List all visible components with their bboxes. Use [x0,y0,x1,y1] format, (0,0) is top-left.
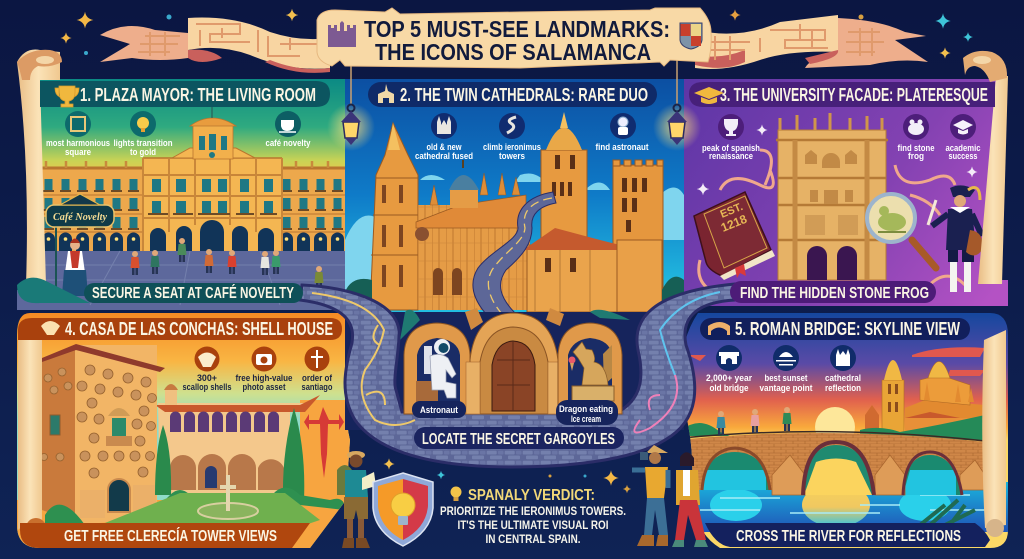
icon: trophy [55,86,79,107]
santiago cross [304,407,344,478]
backpacker traveller [337,451,376,548]
icon: arch bridge [716,345,742,371]
panel 4 scroll [18,338,42,530]
winding road [473,192,556,314]
feature labels: scallop shells [182,382,232,393]
icon: cap [950,114,976,140]
woman in red dress [62,238,88,296]
panel 2 header [368,82,657,107]
icon: cathedral [431,113,457,139]
feature labels [702,143,980,162]
icon: scallop [194,346,220,372]
lantern left [327,65,375,151]
title text: TOP 5 MUST-SEE LANDMARKS: [364,16,670,42]
icon: cathedral reflection [830,345,856,371]
tree clumps [346,276,684,300]
astronaut label: Astronaut [420,405,459,416]
scholar [928,185,982,292]
verdict text: PRIORITIZE THE IERONIMUS TOWERS. [440,504,626,518]
old cathedral [370,123,530,310]
icon: tower climb [499,113,525,139]
panel 1: Plaza Mayor [17,79,347,311]
feature labels: square [65,147,91,158]
feature labels: santiago [302,382,333,393]
feature labels: cathedral [825,373,861,384]
feature labels: peak of spanish [702,143,760,154]
panel 1 header: 1. PLAZA MAYOR: THE LIVING ROOM [80,85,316,105]
title banner [317,8,711,68]
panel 4: Casa de las Conchas [17,313,370,550]
clouds [345,174,684,300]
panel 4 callout [20,523,310,548]
skyline [865,360,985,435]
panel 2 header: 2. THE TWIN CATHEDRALS: RARE DUO [400,85,648,105]
feature labels [182,373,333,393]
feature labels: frog [908,151,924,162]
feature labels: towers [499,151,525,162]
panel 2 icons and labels [415,113,649,162]
feature labels: 2,000+ year [706,373,752,384]
icon: graduation cap [694,87,724,104]
photographer couple [632,445,708,547]
panel 5 callout [705,523,990,547]
courtyard [100,493,320,525]
feature labels: cathedral fused [415,151,473,162]
feature labels [706,373,861,394]
panel 5 icons and labels [706,345,861,394]
cypress trees and bushes [155,408,304,500]
book EST. 1218: EST. [719,201,745,221]
plaza people [130,238,324,290]
locate gargoyles callout [414,427,624,449]
dragon label [556,400,618,425]
panel 5 scroll [982,330,1006,528]
feature labels: find stone [898,143,934,154]
panel 1 callout: SECURE A SEAT AT CAFÉ NOVELTY [92,285,294,302]
locate gargoyles callout: LOCATE THE SECRET GARGOYLES [422,431,615,448]
right ribbon [695,15,928,69]
icon: cup [718,114,744,140]
icon: camera [252,346,276,372]
cafe novelty sign: Café Novelty [53,211,107,223]
cafe novelty sign [46,194,114,300]
plaza building [40,107,345,252]
feature labels: café novelty [266,138,311,149]
panel 4 icons and labels [182,346,333,393]
decorative stars [60,9,973,59]
right scroll [963,51,1008,284]
feature labels: old & new [426,142,462,153]
panel 3: University Facade [684,79,1014,307]
icon: santiago cross [304,346,330,372]
icon: bulb [450,486,462,501]
panel 1 header [40,81,330,107]
feature labels: old bridge [710,383,748,394]
title text [364,16,670,65]
feature labels: find astronaut [596,142,649,153]
panel 2: Twin Cathedrals [345,79,684,314]
panel 5: Roman Bridge [675,313,1010,549]
verdict shield [373,473,433,546]
central door arch [465,308,564,414]
golden swirl on path [312,293,415,425]
panel 3 callout: FIND THE HIDDEN STONE FROG [740,285,929,302]
new cathedral and towers [523,112,663,312]
feature labels: renaissance [709,151,753,162]
feature labels: 300+ [197,373,217,384]
astronaut label [412,401,466,418]
icon: bridge [708,322,730,335]
bridge [678,432,985,495]
feature labels: climb ieronimus [483,142,541,153]
river [675,482,1010,532]
title text: THE ICONS OF SALAMANCA [375,39,651,65]
icon: square plaza [65,111,91,137]
feature labels: to gold [130,147,156,158]
panel 1 bottom tail [17,278,90,303]
book EST. 1218: 1218 [719,212,749,235]
icon: coat of arms [680,23,702,49]
distant trees [682,415,985,440]
shell house tower [40,344,165,525]
facade [776,113,888,280]
feature labels [415,142,649,162]
verdict text [440,486,626,546]
panel 5 callout: CROSS THE RIVER FOR REFLECTIONS [736,528,961,545]
panel 4 header: 4. CASA DE LAS CONCHAS: SHELL HOUSE [65,319,333,339]
feature labels: lights transition [114,138,173,149]
icon: coffee cup [275,111,301,137]
icon: sunset [773,345,799,371]
feature labels: success [948,151,978,162]
panel 5 header [700,318,970,340]
feature labels: order of [302,373,333,384]
icon: astronaut [610,113,636,139]
central path area [300,284,735,467]
blue and pink swirl on path [660,292,720,375]
verdict text: IT'S THE ULTIMATE VISUAL ROI [458,518,608,532]
feature labels: most harmonious [46,138,110,149]
panel 1 icons and labels [46,111,311,158]
left scroll [17,50,62,285]
feature labels: best sunset [764,373,808,384]
verdict stars [383,458,631,493]
icon: light bulb [130,111,156,137]
sun [815,407,855,434]
cloister [155,384,320,495]
tourists on bridge [716,407,792,435]
panel 3 icons and labels [702,114,980,162]
icon: church [378,84,394,103]
panel 4 header [18,318,342,340]
feature labels [46,138,311,158]
panel 4 callout: GET FREE CLERECÍA TOWER VIEWS [64,528,277,545]
verdict text: SPANALY VERDICT: [468,487,595,504]
feature labels: free high-value [236,373,292,384]
icon: frog [903,114,929,140]
astronaut arch [404,323,470,414]
verdict text: IN CENTRAL SPAIN. [486,532,580,546]
book EST. 1218 [694,192,775,280]
palm leaves [920,500,975,525]
lantern right [653,58,701,151]
feature labels: vantage point [760,383,813,394]
feature labels: reflection [825,383,861,394]
icon: castle [328,21,356,47]
icon: shell [41,321,60,335]
feature labels: photo asset [242,382,286,393]
panel 1 callout [84,283,303,303]
left ribbon [100,18,330,73]
dragon label: Dragon eating [559,404,613,415]
panel 3 header [689,82,995,107]
dragon label: Ice cream [571,414,601,425]
plaza floor [17,251,347,311]
feature labels: academic [946,143,980,154]
dragon arch [558,323,622,414]
secret gargoyle arches [404,308,622,414]
magnifier with frog [867,194,936,268]
panel 3 callout [730,281,936,303]
decorative swirls [699,150,965,290]
